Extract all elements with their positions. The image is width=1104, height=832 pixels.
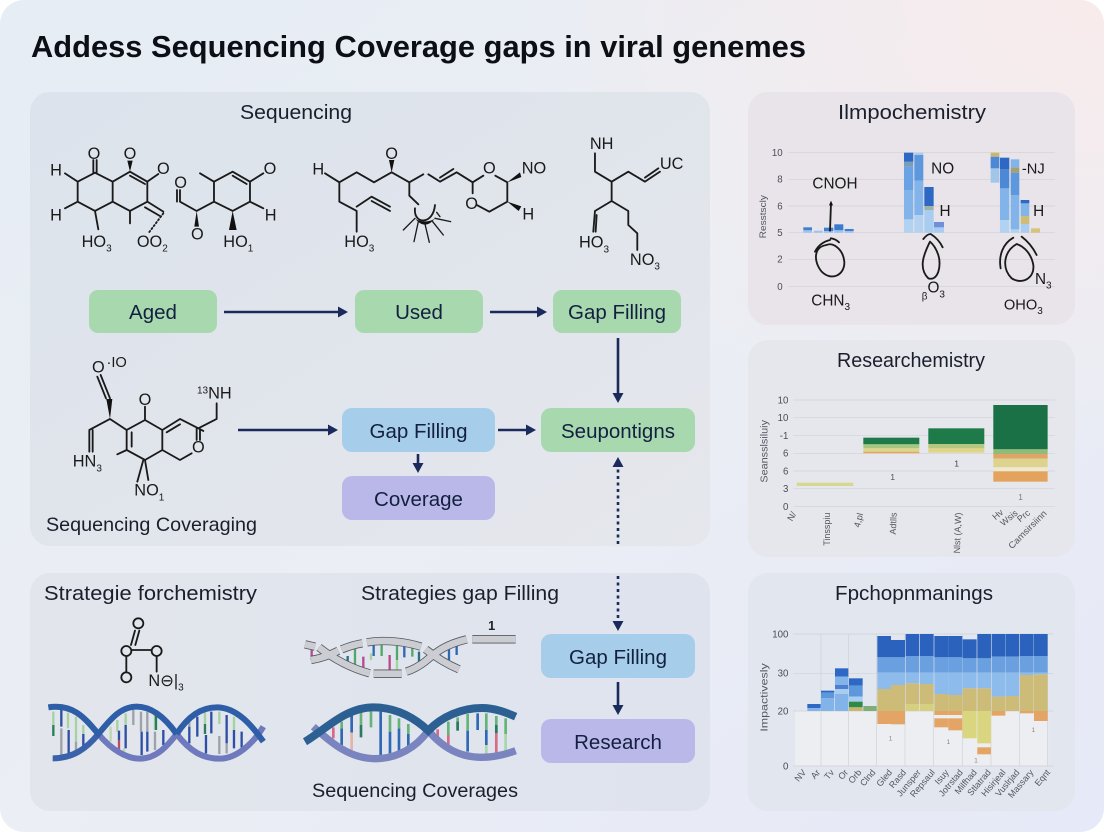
flow node: used bbox=[355, 290, 483, 333]
arrow: used to gap filling bbox=[490, 306, 547, 318]
heading: strategies gap filling: Strategies gap Filling bbox=[361, 582, 559, 605]
chart: stacked green bars bbox=[759, 395, 1055, 554]
chart: stacked columns: Vuslrjad bbox=[993, 768, 1022, 799]
chart: impochemistry bars: 10 bbox=[772, 148, 783, 159]
molecule: ring two: 1 bbox=[248, 244, 254, 255]
molecule: long chain: H bbox=[312, 160, 324, 178]
molecule: lower structure: 13 bbox=[197, 386, 209, 397]
chart: stacked columns: Impactivesly bbox=[759, 663, 770, 732]
molecule: branched chain: NO bbox=[630, 251, 654, 269]
chart: stacked columns: Ar bbox=[809, 768, 822, 781]
icon: fragmented gray dna: 1 bbox=[488, 619, 495, 633]
molecule: ring two: H bbox=[265, 206, 277, 224]
chart: stacked green bars: 6 bbox=[783, 466, 788, 477]
molecule: fused rings one: OO bbox=[137, 233, 162, 251]
chart: stacked columns: Tv bbox=[822, 767, 837, 782]
flow node: gap filling green bbox=[553, 290, 681, 333]
icon: dna helix left bbox=[48, 707, 263, 759]
icon: small molecule: 3 bbox=[178, 683, 184, 694]
chart: stacked green bars: 6 bbox=[783, 449, 788, 460]
chart: impochemistry bars: H bbox=[939, 203, 951, 220]
chart: stacked columns: Or bbox=[836, 768, 850, 782]
molecule: lower structure: HN bbox=[73, 453, 96, 471]
chart: stacked green bars: -1 bbox=[780, 431, 788, 442]
chart: stacked columns: Eqnt bbox=[1033, 767, 1052, 788]
chart: impochemistry bars: 3 bbox=[939, 289, 945, 300]
chart: stacked columns: 100 bbox=[772, 629, 788, 640]
molecule: lower structure: O bbox=[139, 391, 151, 409]
chart: stacked columns: 1 bbox=[889, 736, 893, 743]
molecule: ring two: O bbox=[174, 174, 187, 192]
chart: stacked columns: Junsper bbox=[895, 768, 923, 798]
chart: stacked green bars: 1 bbox=[1018, 493, 1023, 502]
arrow: dotted up to seupontigns bbox=[612, 457, 624, 544]
flow node: seupontigns: Seupontigns bbox=[561, 420, 675, 443]
molecule: ring two: O bbox=[264, 160, 276, 178]
molecule: fused rings one: 3 bbox=[106, 244, 112, 255]
chart: impochemistry bars: CNOH bbox=[812, 175, 858, 192]
heading: fpchopnmanings: Fpchopnmanings bbox=[835, 582, 993, 605]
chart: stacked columns bbox=[759, 629, 1053, 800]
chart: impochemistry bars: H bbox=[1033, 203, 1044, 220]
flow node: seupontigns bbox=[541, 408, 695, 452]
chart: stacked green bars: Prc bbox=[1015, 508, 1032, 524]
icon: fragmented gray dna bbox=[305, 619, 516, 674]
arrow: gap filling to coverage bbox=[412, 454, 424, 473]
chart: impochemistry bars: OHO bbox=[1004, 297, 1037, 313]
molecule: long chain: O bbox=[385, 145, 398, 163]
molecule: branched chain: NH bbox=[590, 135, 613, 153]
icon: small molecule bbox=[121, 618, 184, 694]
chart: stacked columns: Milfhad bbox=[953, 768, 979, 796]
flow node: gap filling blue bbox=[342, 408, 495, 452]
arrow: aged to used bbox=[224, 306, 348, 318]
chart: impochemistry bars: NO bbox=[931, 160, 954, 177]
chart: impochemistry bars bbox=[758, 148, 1055, 317]
flow node: gap filling lower: Gap Filling bbox=[569, 646, 667, 669]
molecule: branched chain: 3 bbox=[603, 244, 609, 255]
chart: stacked columns: Rasd bbox=[887, 768, 908, 790]
flow node: research: Research bbox=[574, 731, 662, 754]
chart: stacked columns: Hisirjeal bbox=[979, 768, 1008, 798]
molecule: ring two: O bbox=[191, 226, 204, 244]
chart: impochemistry bars: 3 bbox=[1046, 281, 1052, 292]
molecule: fused rings one: O bbox=[124, 145, 136, 163]
arrow: gap filling to research bbox=[612, 682, 624, 715]
chart: stacked green bars: 0 bbox=[783, 502, 788, 513]
chart: stacked columns: Clnd bbox=[858, 768, 878, 788]
chart: impochemistry bars: N bbox=[1035, 271, 1046, 288]
chart: impochemistry bars: β bbox=[922, 291, 928, 302]
flow node: gap filling blue: Gap Filling bbox=[370, 420, 468, 443]
molecule: lower structure: 1 bbox=[159, 492, 165, 503]
heading: sequencing: Sequencing bbox=[240, 101, 352, 124]
molecule: branched chain: 3 bbox=[654, 262, 660, 273]
molecule: long chain bbox=[312, 145, 546, 255]
chart: stacked columns: 1 bbox=[1031, 727, 1035, 734]
chart: stacked columns: 1 bbox=[946, 739, 950, 746]
chart: stacked columns: 30 bbox=[778, 669, 788, 680]
molecule: fused rings one bbox=[50, 145, 170, 255]
flow node: gap filling lower bbox=[541, 634, 695, 678]
icon: small molecule: N⊖| bbox=[148, 672, 178, 690]
chart: stacked columns: 20 bbox=[778, 706, 788, 717]
molecule: ring two bbox=[174, 160, 277, 255]
panel: sequencing bbox=[30, 92, 710, 546]
chart: impochemistry bars: O bbox=[927, 280, 939, 297]
chart: stacked green bars: N/ bbox=[785, 510, 799, 523]
molecule: long chain: 3 bbox=[369, 244, 375, 255]
molecule: long chain: HO bbox=[344, 233, 369, 251]
chart: stacked green bars: Adtlls bbox=[888, 512, 899, 535]
molecule: fused rings one: H bbox=[50, 206, 62, 224]
chart: stacked columns: Repsaul bbox=[908, 768, 937, 799]
chart: stacked columns: NV bbox=[793, 768, 808, 784]
chart: stacked green bars: 4,pl bbox=[852, 512, 865, 529]
chart: stacked columns: Gled bbox=[874, 768, 894, 788]
flow node: used: Used bbox=[395, 301, 443, 324]
panel: strategies bbox=[30, 573, 710, 811]
chart: stacked green bars: 10 bbox=[778, 413, 788, 424]
molecule: lower structure: O bbox=[92, 358, 105, 376]
chart: stacked green bars: 1 bbox=[890, 472, 895, 482]
heading: impochemistry: Ilmpochemistry bbox=[838, 101, 987, 124]
molecule: lower structure: ·IO bbox=[106, 355, 127, 371]
molecule: lower structure bbox=[73, 355, 232, 503]
flow node: research bbox=[541, 719, 695, 763]
molecule: lower structure: NH bbox=[208, 384, 232, 402]
flow node: coverage: Coverage bbox=[374, 488, 463, 511]
flow node: aged bbox=[89, 290, 217, 333]
molecule: fused rings one: O bbox=[88, 145, 100, 163]
chart: stacked columns: 1 bbox=[974, 758, 978, 765]
arrow: gap filling to seupontigns bbox=[612, 338, 624, 403]
chart: impochemistry bars: 3 bbox=[1037, 306, 1043, 317]
chart: impochemistry bars: 2 bbox=[777, 255, 783, 266]
molecule: long chain: NO bbox=[522, 160, 546, 178]
molecule: fused rings one: 2 bbox=[162, 244, 168, 255]
panel: impochemistry bbox=[748, 92, 1075, 325]
chart: stacked columns: Massary bbox=[1006, 767, 1036, 800]
chart: stacked green bars: Tinsspiu bbox=[822, 513, 832, 546]
heading: strategie forchemistry: Strategie forchemistry bbox=[44, 582, 258, 605]
molecule: branched chain bbox=[579, 135, 684, 273]
molecule: long chain: O bbox=[483, 160, 496, 178]
arrow: molecule to gap filling bbox=[238, 424, 338, 436]
chart: impochemistry bars: 3 bbox=[844, 302, 850, 313]
molecule: fused rings one: HO bbox=[82, 233, 106, 251]
chart: impochemistry bars: 5 bbox=[777, 228, 783, 239]
chart: impochemistry bars: -NJ bbox=[1022, 161, 1045, 177]
panel: fpchopnmanings bbox=[748, 573, 1075, 811]
molecule: branched chain: HO bbox=[579, 234, 603, 252]
molecule: fused rings one: H bbox=[50, 161, 62, 179]
arrow: gap filling to seupontigns horizontal bbox=[498, 424, 536, 436]
heading: researchemistry: Researchemistry bbox=[837, 349, 986, 372]
chart: impochemistry bars: 8 bbox=[777, 175, 783, 186]
chart: stacked green bars: 1 bbox=[954, 459, 959, 469]
chart: impochemistry bars: CHN bbox=[811, 292, 844, 309]
chart: stacked green bars: Hv bbox=[990, 507, 1006, 522]
chart: stacked green bars: 10 bbox=[778, 395, 788, 406]
flow node: coverage bbox=[342, 476, 495, 520]
chart: stacked columns: 0 bbox=[783, 761, 788, 772]
molecule: long chain: O bbox=[465, 195, 478, 213]
molecule: branched chain: UC bbox=[660, 155, 684, 173]
chart: stacked columns: Isuy bbox=[933, 767, 951, 787]
molecule: fused rings one: O bbox=[157, 160, 170, 178]
flow node: aged: Aged bbox=[129, 301, 177, 324]
chart: stacked green bars: Seansslsiluiy bbox=[759, 420, 770, 483]
chart: stacked green bars: 3 bbox=[783, 484, 788, 495]
arrow: dotted down to gap filling bbox=[612, 576, 624, 631]
panel: researchemistry bbox=[748, 340, 1075, 557]
chart: stacked columns: Orb bbox=[846, 768, 864, 785]
molecule: long chain: H bbox=[522, 206, 534, 224]
chart: stacked green bars: Nlst (A,W) bbox=[952, 512, 963, 554]
molecule: ring two: HO bbox=[223, 233, 248, 251]
caption: sequencing coveraging: Sequencing Coveraging bbox=[46, 514, 257, 536]
chart: impochemistry bars: 6 bbox=[777, 201, 783, 212]
chart: stacked columns: Jotrstad bbox=[937, 768, 965, 798]
molecule: lower structure: NO bbox=[134, 482, 159, 500]
title: Addess Sequencing Coverage gaps in viral genemes bbox=[31, 29, 806, 64]
icon: dna helix right bbox=[305, 707, 516, 759]
chart: stacked green bars: Wsis bbox=[998, 508, 1020, 528]
molecule: lower structure: 3 bbox=[96, 463, 102, 474]
caption: sequencing coverages: Sequencing Coverages bbox=[312, 780, 518, 802]
chart: impochemistry bars: Resstscly bbox=[758, 194, 768, 238]
chart: stacked columns: Stlatrad bbox=[965, 768, 993, 798]
chart: stacked green bars: Camsirsiinn bbox=[1006, 508, 1049, 551]
flow node: gap filling green: Gap Filling bbox=[568, 301, 666, 324]
molecule: lower structure: O bbox=[192, 438, 205, 456]
chart: impochemistry bars: 0 bbox=[777, 282, 783, 293]
